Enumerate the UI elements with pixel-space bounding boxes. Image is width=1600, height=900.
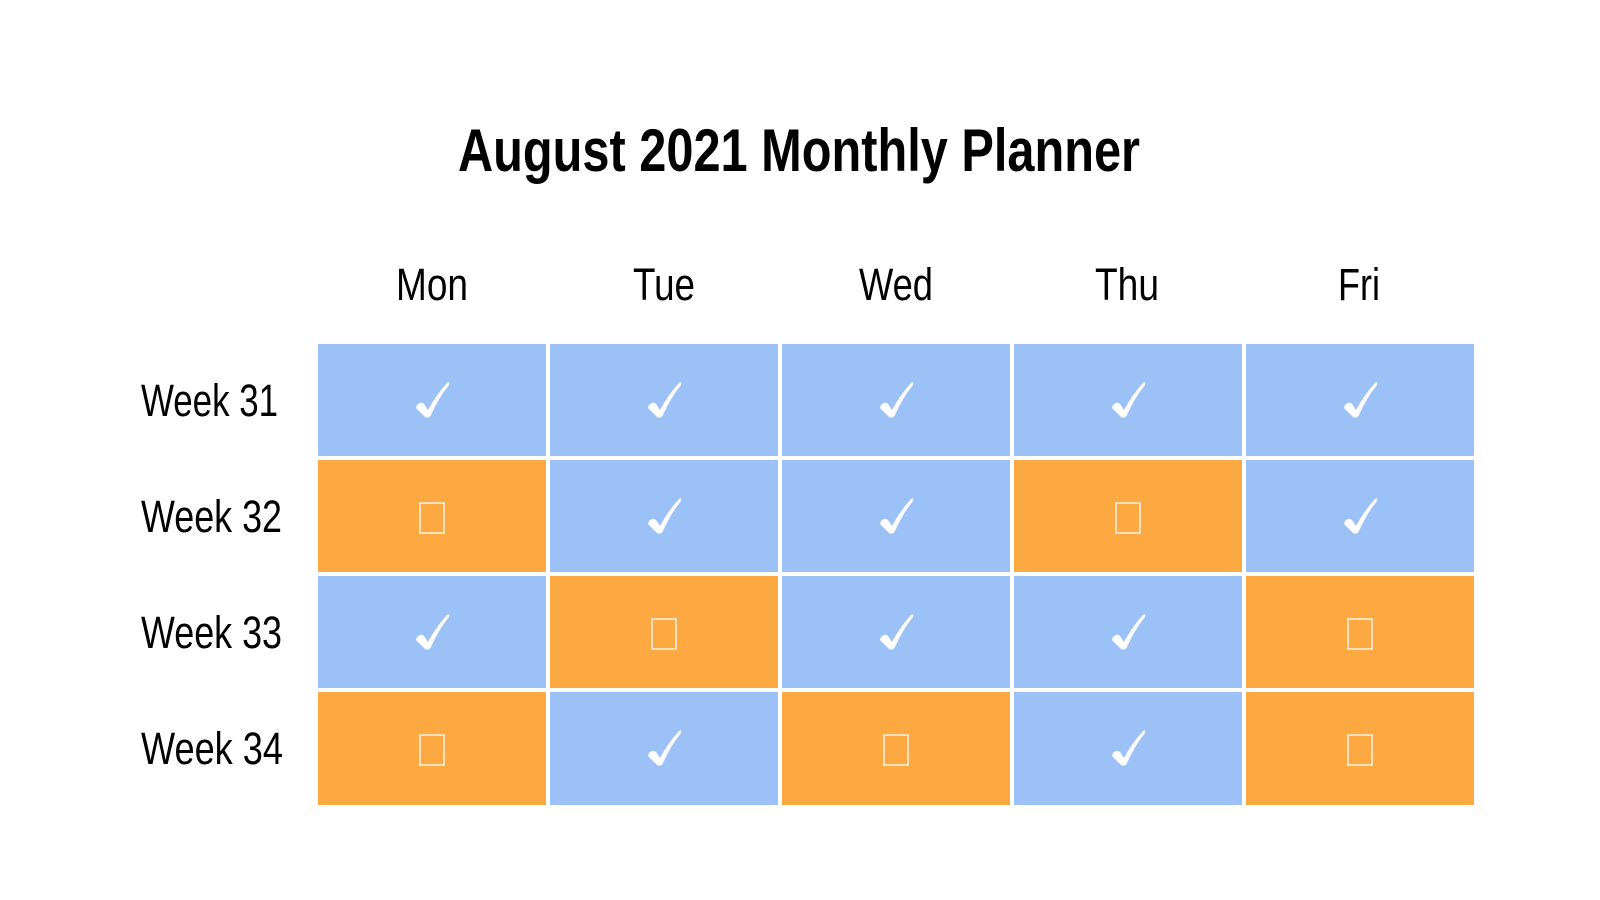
- planner grid: [318, 344, 1474, 805]
- day headers: Tue: [633, 259, 695, 310]
- week labels: Week 31: [141, 375, 278, 426]
- row: week 31: [318, 344, 1474, 456]
- day headers: Mon: [396, 259, 468, 310]
- week labels: Week 34: [141, 723, 283, 774]
- row: week 34: [318, 692, 1474, 805]
- title: August 2021 Monthly Planner: [458, 117, 1140, 184]
- row: week 33: [318, 576, 1474, 688]
- day headers: Wed: [859, 259, 933, 310]
- week labels: Week 33: [141, 607, 282, 658]
- row: week 32: [318, 460, 1474, 572]
- day headers: [396, 259, 1380, 310]
- week labels: [141, 375, 283, 774]
- day headers: Fri: [1338, 259, 1380, 310]
- week labels: Week 32: [141, 491, 282, 542]
- day headers: Thu: [1095, 259, 1159, 310]
